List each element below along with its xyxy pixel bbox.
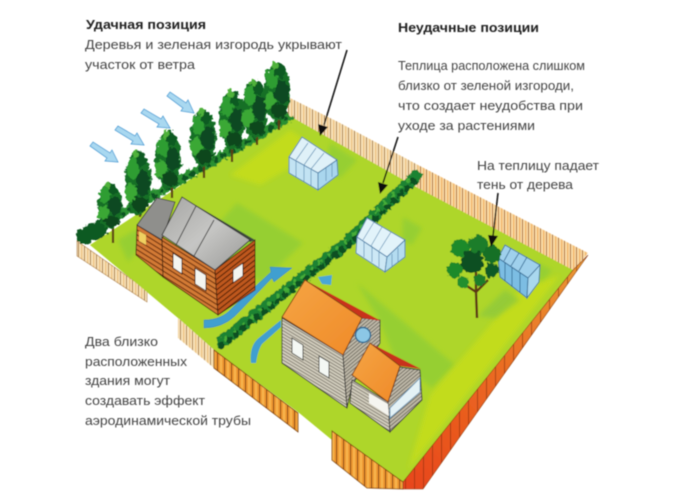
left wall [282, 318, 347, 408]
back fence left [288, 97, 418, 190]
tree trunks [113, 110, 279, 243]
greenhouse 1 [289, 137, 338, 190]
text: good position description [85, 38, 342, 72]
main side wall [215, 240, 255, 315]
windows [173, 253, 243, 291]
annex roof [137, 198, 175, 240]
roof [282, 280, 362, 355]
trees row [98, 62, 290, 229]
heading: bad positions [398, 21, 585, 133]
annex right wall [388, 367, 422, 432]
text: tree shadow on greenhouse: На теплицу падает [477, 159, 599, 173]
fence red right pickets [403, 255, 588, 489]
greenhouse 3 [498, 245, 540, 298]
fence pale lower-left [178, 318, 214, 368]
text: greenhouse too close to hedge: Теплица расположена слишком [398, 59, 585, 73]
annex red eave [370, 343, 421, 369]
illustration: garden plot [77, 50, 588, 489]
lawn yellow highlights [230, 130, 560, 470]
main roof back [182, 197, 255, 242]
black pointer arrow 2 [378, 137, 398, 194]
shade tree canopy [447, 235, 501, 288]
text: greenhouse too close to hedge: близко от зеленой изгороди, [398, 79, 574, 93]
windows [292, 338, 329, 378]
annex walls [136, 225, 163, 277]
annex roof [352, 343, 400, 402]
text: greenhouse too close to hedge [398, 59, 585, 133]
annex left wall [350, 380, 390, 432]
text: wind tunnel effect: здания могут [85, 374, 170, 388]
black pointer arrow 3 [488, 193, 498, 247]
roof seams [176, 206, 214, 256]
tube wind arrow 2 tip [318, 275, 332, 285]
text: wind tunnel effect: Два близко [85, 335, 158, 349]
greenhouse 2 [356, 218, 405, 272]
heading: good position: Удачная позиция [86, 18, 206, 32]
gable wall [343, 318, 380, 408]
lawn shadow patches [118, 143, 552, 388]
fence orange bottom [332, 431, 403, 489]
black pointer arrow 1 [318, 50, 347, 136]
annex glass [390, 378, 420, 418]
text: good position description: Деревья и зеленая изгородь укрывают [85, 38, 342, 52]
lawn [90, 115, 573, 482]
text: wind tunnel effect: создавать эффект [85, 394, 205, 408]
annex window [369, 393, 389, 416]
fence orange left [214, 350, 298, 432]
back fence right [418, 165, 588, 272]
wind arrows [90, 92, 194, 162]
roof red eave [305, 280, 381, 321]
tube wind arrow 2 [251, 320, 281, 363]
round window [356, 328, 370, 342]
text: greenhouse too close to hedge: уходе за растениями [398, 119, 535, 133]
heading: bad positions: Неудачные позиции [398, 21, 539, 35]
wood house [136, 197, 255, 315]
heading: good position [85, 18, 342, 72]
text: good position description: участок от ветра [85, 58, 195, 72]
front fence left [77, 241, 147, 302]
shade tree trunk [461, 272, 488, 318]
text: wind tunnel effect: расположенных [85, 355, 188, 369]
main front wall [162, 237, 218, 315]
text: wind tunnel effect [85, 335, 251, 428]
fence red right [403, 255, 588, 489]
brick house [282, 280, 422, 432]
text: greenhouse too close to hedge: что создает неудобства при [398, 99, 583, 113]
text: tree shadow on greenhouse: тень от дерева [477, 178, 573, 192]
text: wind tunnel effect: аэродинамической трубы [85, 414, 251, 428]
hedge left [84, 118, 288, 236]
tube wind arrow 1 [204, 267, 292, 328]
main roof [162, 197, 250, 270]
annex window [139, 231, 146, 245]
tree shadow on lawn [478, 290, 520, 318]
hedge central [222, 176, 416, 345]
text: tree shadow on greenhouse [477, 159, 599, 192]
